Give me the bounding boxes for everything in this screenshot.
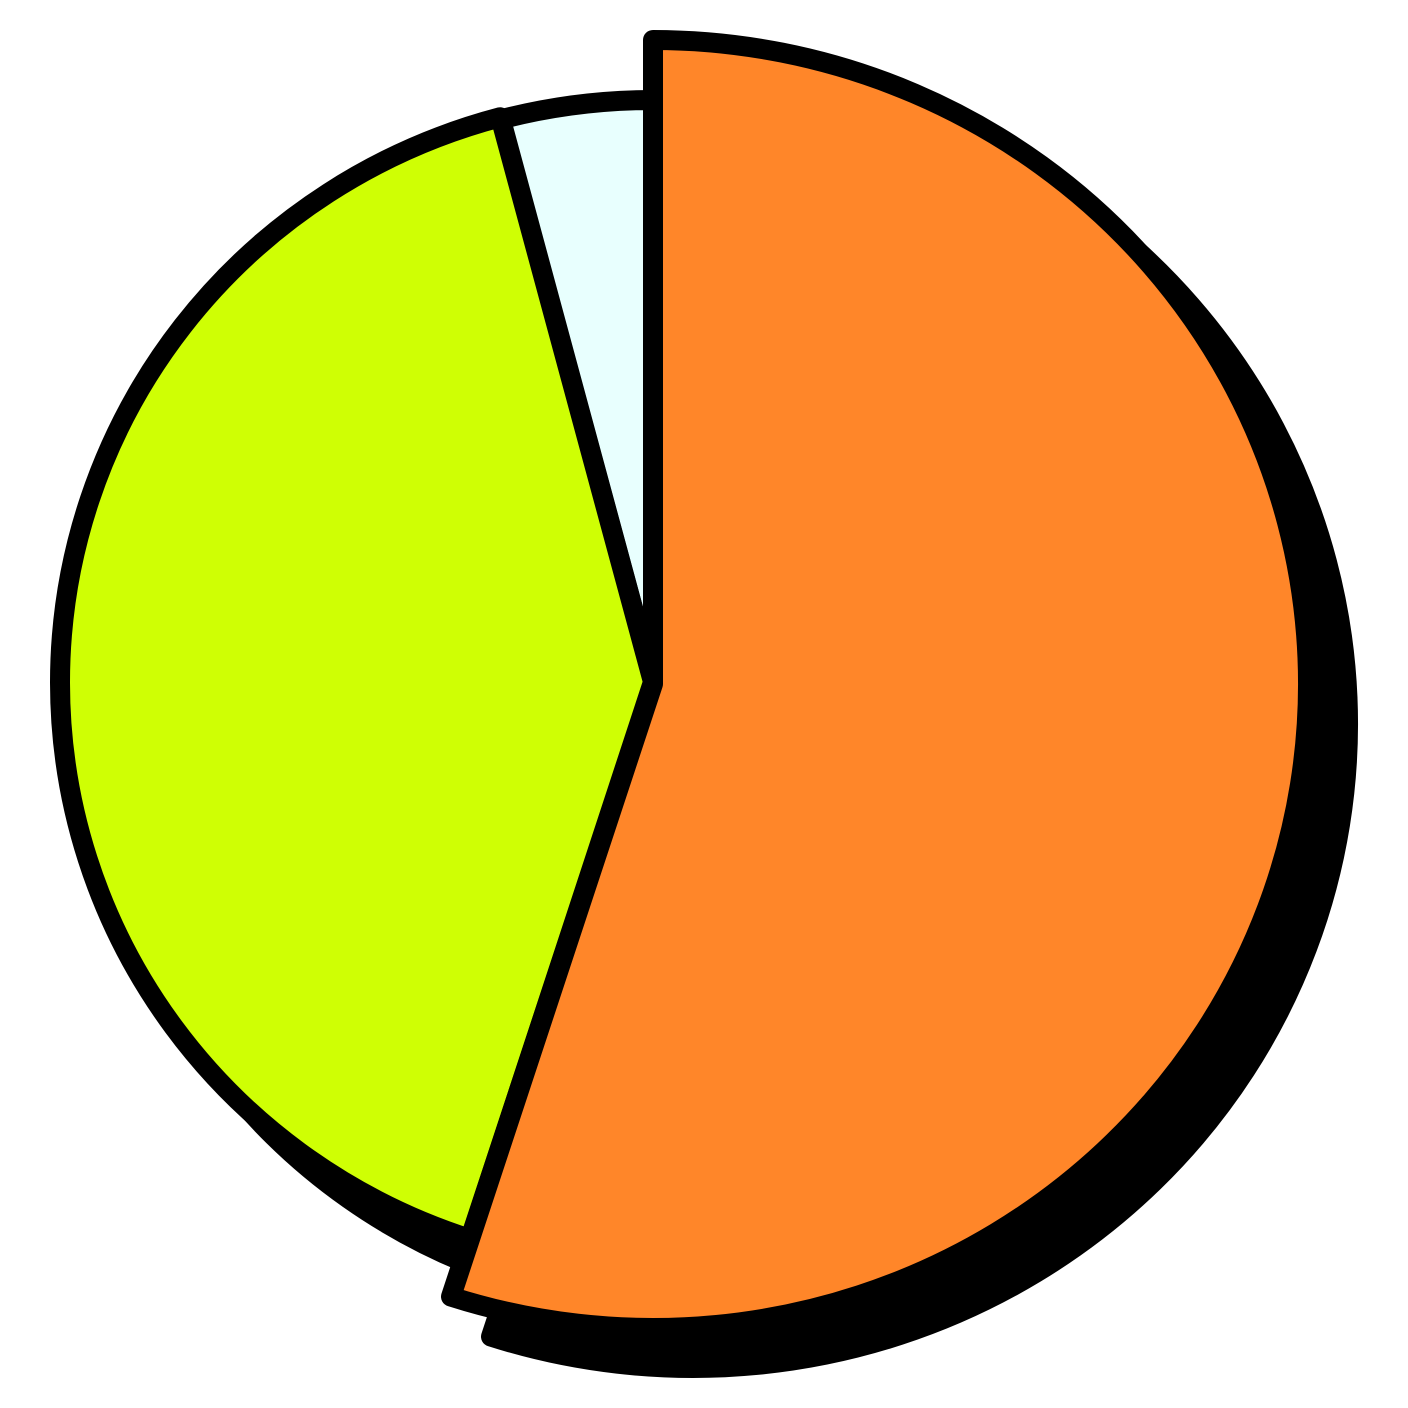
slice: lime green segment xyxy=(60,117,653,1239)
slice: pale blue small segment xyxy=(500,100,653,682)
slice: orange largest segment xyxy=(451,40,1308,1328)
